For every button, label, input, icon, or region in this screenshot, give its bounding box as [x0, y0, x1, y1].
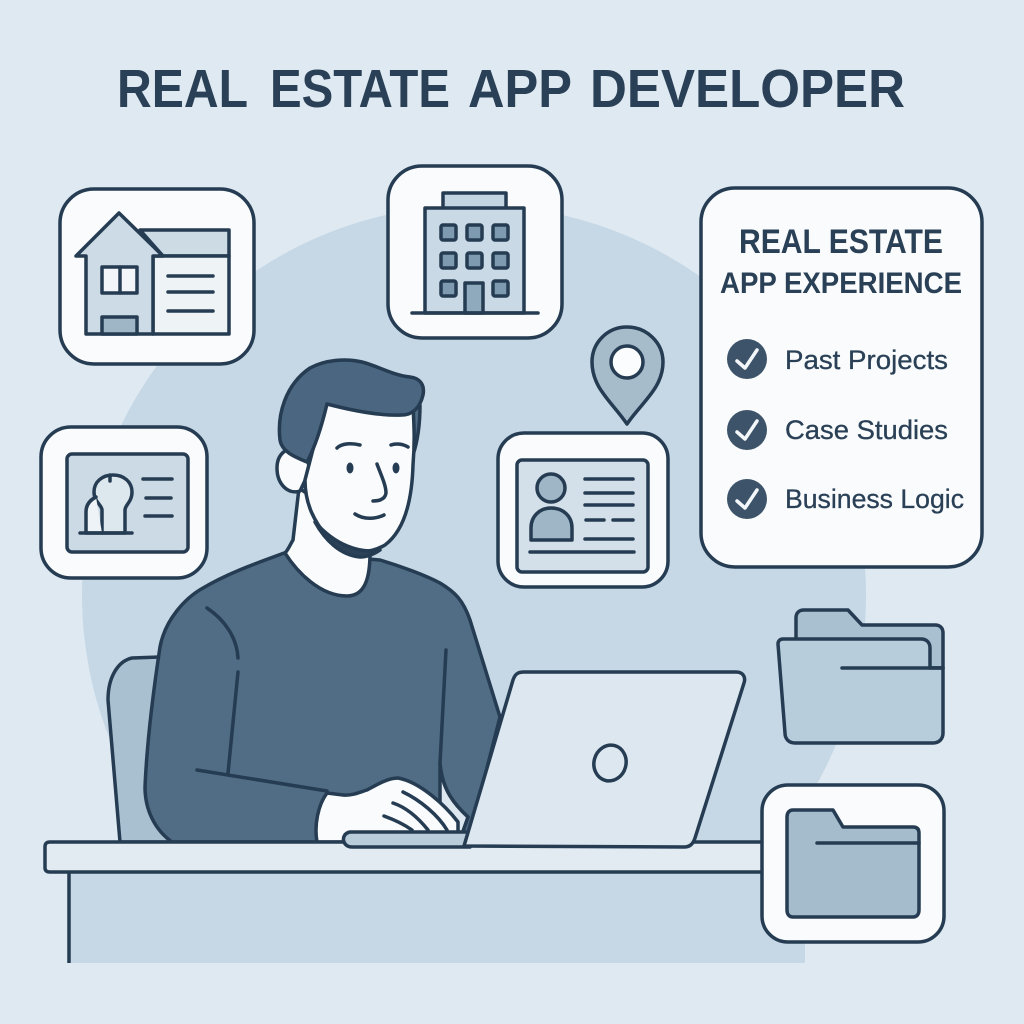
- title: ESTATE: [270, 59, 450, 119]
- checklist item: business logic: Business Logic: [785, 484, 964, 514]
- background circle: [82, 215, 866, 840]
- sweater folds: [197, 608, 327, 791]
- icon: map pin: [592, 327, 663, 424]
- checklist item: past projects: Past Projects: [785, 345, 948, 375]
- desk: [45, 842, 805, 963]
- hair: [279, 360, 423, 462]
- neck: [285, 488, 370, 596]
- ear: [277, 448, 310, 492]
- checklist item: case studies: Case Studies: [785, 415, 948, 445]
- checklist item: case studies: [727, 410, 948, 450]
- sliver behind hand: [440, 763, 468, 834]
- card: ID with arch: [41, 427, 207, 578]
- title: APP: [468, 59, 572, 119]
- sweater: [145, 552, 500, 842]
- title: DEVELOPER: [590, 59, 905, 119]
- checklist item: business logic: [727, 479, 964, 519]
- panel heading: APP EXPERIENCE: [720, 267, 962, 300]
- card: profile: [498, 433, 668, 587]
- hair back sliver: [405, 400, 420, 455]
- card: house listing: [60, 189, 254, 364]
- eyes, nose, smile: [346, 462, 354, 474]
- checklist item: past projects: [727, 339, 948, 379]
- person: [145, 360, 500, 842]
- laptop logo: [590, 741, 630, 785]
- panel heading: [720, 223, 962, 300]
- chair: [108, 657, 175, 842]
- panel heading: REAL ESTATE: [739, 223, 943, 261]
- panel: real estate app experience: [701, 188, 982, 567]
- jaw shadow: [315, 522, 380, 557]
- hand: [316, 778, 458, 842]
- title: REAL: [117, 59, 248, 119]
- card: folder: [762, 785, 944, 942]
- face: [305, 395, 414, 552]
- title: [117, 59, 905, 119]
- card: office building: [388, 166, 562, 338]
- icon: folder: [778, 610, 943, 743]
- laptop: [343, 672, 745, 847]
